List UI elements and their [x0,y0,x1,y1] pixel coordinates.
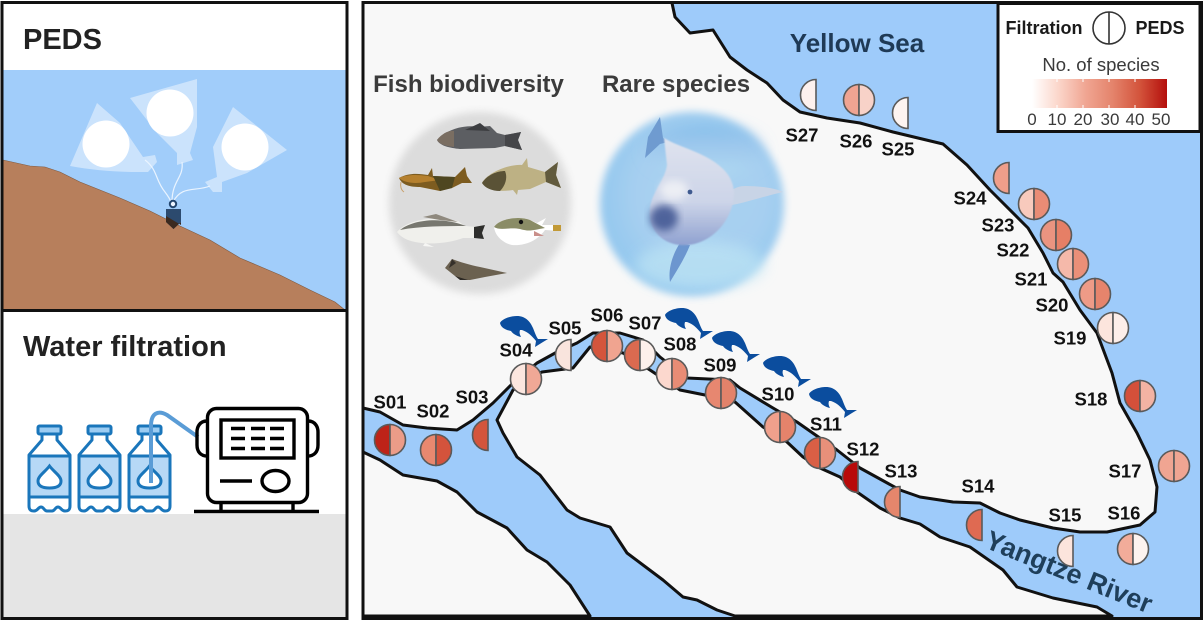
site markers [374,80,1189,566]
body parts [645,117,668,158]
land: north shore [363,3,1157,532]
site S26 [844,84,874,116]
site S22 [1041,220,1071,250]
photo: fish species [389,112,571,294]
legend: colour bar ticks: 30 [1101,110,1119,129]
site labels: S21 [1015,268,1047,290]
site S24 [993,162,1009,194]
whale icon 2 [665,308,713,339]
water [3,70,346,310]
site S18 [1124,380,1156,412]
site labels: S09 [704,354,736,376]
legend: colour bar ticks: 50 [1152,110,1170,129]
site S06 [592,330,622,362]
legend: half circle key [1093,12,1125,44]
legend: PEDS label: PEDS [1135,18,1185,38]
whale icon 4 [763,356,811,387]
fish: carp [437,123,522,150]
panel: Water filtration [2,2,347,618]
site labels: S16 [1108,502,1140,524]
site labels: S03 [456,386,488,408]
legend: colour bar [1032,79,1167,108]
site labels: S02 [417,400,449,422]
icon: bottle 1 [29,426,70,511]
heading: Rare species: Rare species [602,71,750,98]
fish: silver carp [482,158,561,195]
whale icon 3 [712,331,760,362]
land: central island [497,347,1112,616]
site S12 [842,462,858,492]
site labels [374,124,1141,526]
icon: bottle 3 [129,426,170,511]
site labels: S11 [810,414,842,434]
site labels: S27 [786,124,818,146]
site labels: S23 [982,214,1014,236]
legend: colour bar ticks: 10 [1048,110,1066,129]
heading: Fish biodiversity: Fish biodiversity [373,71,565,98]
site S10 [764,412,795,442]
site labels: S04 [500,340,533,360]
site labels: S06 [591,304,623,326]
site S07 [624,340,656,370]
site labels: S01 [374,392,406,412]
site S23 [1018,188,1050,220]
tube [151,413,198,483]
site S25 [892,97,908,128]
site S01 [374,424,405,456]
site labels: S20 [1036,294,1068,316]
site labels: S12 [847,438,879,460]
site labels: S26 [840,130,872,152]
heading: Yangtze River: Yangtze River [981,525,1157,619]
site S03 [472,420,488,450]
site labels: S05 [549,318,581,338]
site S17 [1158,450,1190,482]
legend: colour bar ticks: 0 [1027,110,1037,129]
fish: puffer [494,218,561,245]
site S14 [966,510,982,540]
panel: study area map [363,2,1202,619]
site S21 [1058,248,1088,280]
site labels: S07 [629,312,661,334]
legend: filtration label: Filtration [1006,18,1082,38]
site S05 [555,340,571,370]
icon: bottle 2 [79,426,120,511]
site S04 [510,364,542,394]
site S27 [800,80,816,110]
heading: Water filtration: Water filtration [23,331,227,363]
site labels: S14 [962,476,995,496]
site labels: S15 [1049,504,1081,526]
site labels: S10 [762,384,794,404]
panel frames [2,2,347,618]
site S08 [656,358,687,390]
panel: PEDS [2,2,347,310]
bench [3,514,346,617]
site S02 [420,434,452,466]
site labels: S17 [1109,460,1141,482]
fish: catfish [399,167,472,192]
site S09 [706,378,736,408]
photo: finless porpoise [600,112,784,296]
site labels: S13 [885,460,917,482]
heading: Yellow Sea: Yellow Sea [790,28,925,58]
whale icon 5 [809,387,857,418]
site labels: S19 [1054,328,1086,348]
land: south shore [363,452,590,616]
site S13 [884,486,900,518]
legend [998,4,1200,132]
site S11 [804,438,836,468]
site S15 [1058,536,1073,566]
legend: colour bar ticks [1027,110,1170,129]
icon: passive samplers in mesh bags [70,79,287,202]
site labels: S22 [997,240,1029,260]
map frame [363,2,1202,618]
whale icon 1 [500,316,548,347]
water [363,3,1201,618]
north shoreline [363,3,1157,532]
fish: mudskipper [445,259,507,280]
site S19 [1098,312,1128,344]
icon: filtration machine [194,408,319,512]
site S20 [1079,278,1110,310]
seabed slope [3,160,345,310]
site S16 [1118,534,1148,564]
site labels: S18 [1075,388,1107,410]
heading: PEDS: PEDS [23,24,102,56]
legend: colour bar ticks: 20 [1074,110,1092,129]
fish: bass [397,214,485,247]
site labels: S08 [664,334,696,354]
site labels: S24 [954,188,987,208]
legend: colour bar ticks: 40 [1126,110,1144,129]
legend: colour scale title: No. of species [1042,54,1160,75]
site labels: S25 [882,138,914,160]
icon: anchor device [166,201,181,229]
